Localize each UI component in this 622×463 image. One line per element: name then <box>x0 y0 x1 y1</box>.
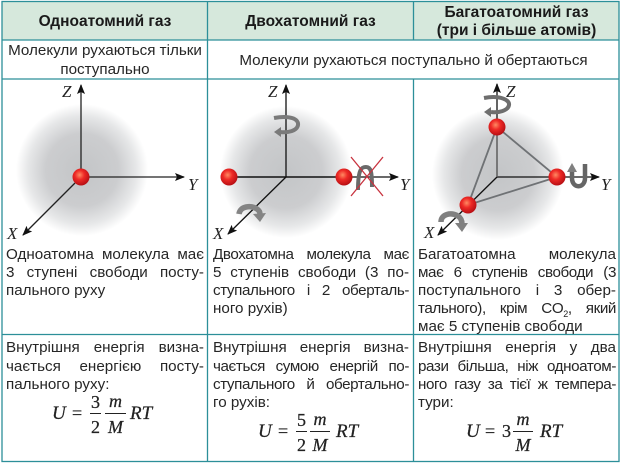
header band <box>2 1 619 40</box>
text: monatomic internal energy: чається енергією посту- <box>6 358 204 375</box>
text: monatomic motion <box>8 42 202 78</box>
icon: rotation around Z <box>274 117 298 137</box>
formula: diatomic energy: U <box>258 421 273 442</box>
text: diatomic degrees of freedom: Двохатомна молекула має <box>213 246 409 263</box>
formula: diatomic energy: 2 <box>297 435 306 455</box>
formula: monatomic energy: 3 <box>91 392 100 412</box>
text: diatomic degrees of freedom: ного рухів) <box>213 300 288 317</box>
formula: polyatomic energy: U <box>466 421 481 442</box>
text: diatomic degrees of freedom <box>213 246 409 317</box>
text: polyatomic internal energy: Внутрішня енергія у два <box>418 339 616 356</box>
diagram: polyatomic molecule: Z <box>506 82 516 101</box>
diagram: monatomic molecule: X <box>6 224 18 243</box>
diagram: diatomic molecule: Y <box>400 175 411 194</box>
diagram: diatomic molecule: X <box>212 224 224 243</box>
heading: polyatomic gas: (три і більше атомів) <box>437 22 596 39</box>
icon: rotation around X <box>441 214 468 232</box>
diagram: monatomic molecule: Z <box>62 82 72 101</box>
text: diatomic internal energy: чається сумою енергій по- <box>213 358 409 375</box>
text: diatomic degrees of freedom: 5 ступенів свободи (3 по- <box>213 264 409 281</box>
formula: polyatomic energy: RT <box>539 421 564 442</box>
icon: rotation around X <box>239 207 266 222</box>
diagram: polyatomic molecule: X <box>423 223 435 242</box>
text: monatomic degrees of freedom: 3 ступені свободи посту- <box>6 264 204 281</box>
formula: diatomic energy: = <box>278 421 288 441</box>
text: diatomic internal energy <box>213 339 409 411</box>
text: polyatomic internal energy: рази більша, ніж одноатом- <box>418 358 616 375</box>
text: diatomic internal energy: го рухів: <box>213 394 270 411</box>
text: monatomic degrees of freedom: Одноатомна молекула має <box>6 246 204 263</box>
text: polyatomic degrees of freedom: має 5 ступенів свободи <box>418 318 583 335</box>
text: polyatomic degrees of freedom <box>418 246 616 335</box>
formula: monatomic energy: m <box>109 391 122 411</box>
formula: diatomic energy: m <box>314 409 326 429</box>
formula: polyatomic energy: 3 <box>502 421 511 441</box>
formula: polyatomic energy: m <box>516 409 530 429</box>
diagram: monatomic molecule: Y <box>188 175 199 194</box>
icon: rotation around Y, crossed out <box>351 157 383 196</box>
formula: monatomic energy: U <box>52 403 67 424</box>
text: polyatomic internal energy: тури: <box>418 394 454 411</box>
heading: diatomic gas: Двохатомний газ <box>245 13 376 30</box>
formula: diatomic energy: 5 <box>297 410 306 430</box>
text: monatomic internal energy <box>6 339 204 393</box>
text: monatomic motion: Молекули рухаються тільки <box>8 42 202 59</box>
formula: monatomic energy: = <box>72 403 82 423</box>
formula: polyatomic energy: M <box>514 435 532 455</box>
formula: diatomic energy: RT <box>335 421 360 442</box>
heading: monatomic gas: Одноатомний газ <box>39 13 171 30</box>
icon: rotation around Y <box>567 163 585 186</box>
text: monatomic degrees of freedom <box>6 246 204 299</box>
text: diatomic degrees of freedom: ступального і 2 оберталь- <box>213 282 409 299</box>
text: diatomic and polyatomic motion: Молекули рухаються поступально й обертаються <box>239 52 588 69</box>
text: polyatomic internal energy: ного газу за тієї ж темпера- <box>418 376 616 393</box>
text: diatomic internal energy: Внутрішня енергія визна- <box>213 339 409 356</box>
text: polyatomic internal energy <box>418 339 616 411</box>
formula: monatomic energy: M <box>107 417 124 437</box>
text: polyatomic degrees of freedom: має 6 ступенів свободи (3 <box>418 264 616 281</box>
text: polyatomic degrees of freedom: Багатоатомна молекула <box>418 246 616 263</box>
diagram: diatomic molecule: Z <box>268 82 278 101</box>
diagram: polyatomic molecule: Y <box>601 175 612 194</box>
text: monatomic internal energy: Внутрішня енергія визна- <box>6 339 204 356</box>
text: monatomic degrees of freedom: пального руху <box>6 282 105 299</box>
text: monatomic motion: поступально <box>60 61 150 78</box>
formula: monatomic energy: 2 <box>91 417 100 437</box>
formula: polyatomic energy: = <box>485 421 495 441</box>
formula: diatomic energy: M <box>312 435 328 455</box>
text: polyatomic degrees of freedom: поступального і 3 обер- <box>418 282 616 299</box>
heading: polyatomic gas <box>437 4 596 39</box>
formula: monatomic energy: RT <box>129 403 154 424</box>
icon: rotation around Z <box>484 97 509 117</box>
text: monatomic internal energy: пального руху: <box>6 376 109 393</box>
text: diatomic internal energy: ступального й обертально- <box>213 376 409 393</box>
heading: polyatomic gas: Багатоатомний газ <box>444 4 589 21</box>
